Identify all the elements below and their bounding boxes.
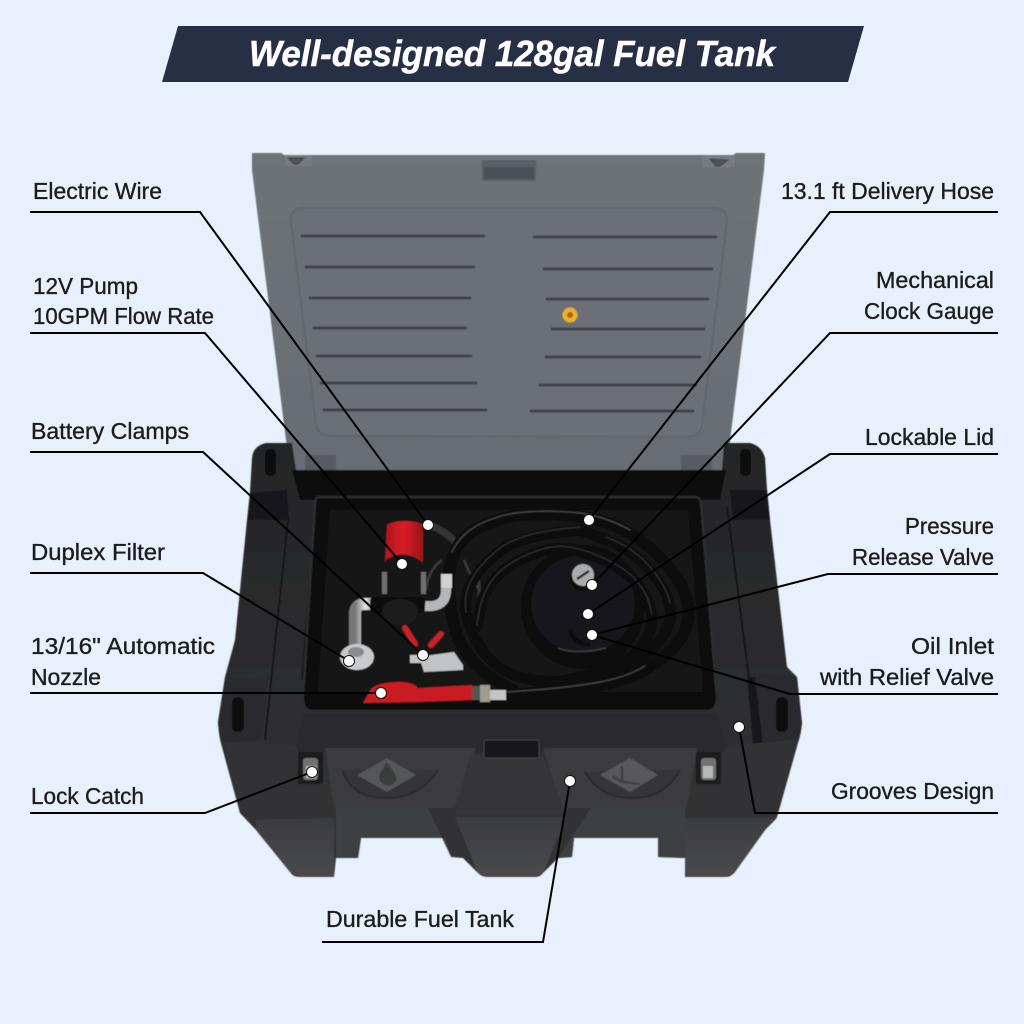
callout: Oil Inlet with Relief Valve (586, 630, 998, 694)
lock catches (298, 752, 721, 784)
callout: Duplex Filter: Duplex Filter (31, 539, 165, 565)
recessed lid panel (291, 208, 727, 437)
front face panels (325, 748, 476, 808)
callout: Oil Inlet with Relief Valve: Oil Inlet (911, 633, 995, 659)
lower skirt (256, 817, 777, 877)
callout: 12V Pump: 10GPM Flow Rate (33, 303, 214, 329)
callout: Grooves Design: Grooves Design (831, 778, 994, 804)
callout: Pressure Release Valve (586, 513, 998, 640)
hazard label right (585, 758, 680, 798)
side handles (218, 673, 802, 745)
callout: Grooves Design (734, 722, 998, 813)
callout: Automatic Nozzle (30, 633, 386, 698)
rear black band (292, 470, 726, 500)
callout: Mechanical Clock Gauge: Mechanical (876, 267, 994, 293)
lid grooves (302, 236, 716, 411)
callout: 12V Pump: 12V Pump (33, 273, 138, 299)
front top surface (295, 713, 727, 752)
callout: Delivery Hose: 13.1 ft Delivery Hose (781, 178, 994, 204)
yellow lid plug (562, 308, 578, 322)
red fuel nozzle (363, 682, 472, 703)
front outer corners (224, 742, 325, 820)
top ear clips (265, 449, 276, 476)
inner tub (303, 497, 717, 711)
callout: Electric Wire (30, 178, 434, 530)
wire to pump (428, 525, 455, 542)
lid handle (482, 160, 536, 181)
callout: Lock Catch: Lock Catch (31, 783, 144, 809)
steel U pipe (355, 604, 376, 648)
ear shadows (248, 490, 289, 520)
callout: Durable Fuel Tank: Durable Fuel Tank (326, 906, 514, 932)
nozzle fitting (472, 686, 480, 700)
steel elbow pipe (425, 588, 446, 606)
callout: Mechanical Clock Gauge: Clock Gauge (864, 298, 994, 324)
tank lid (252, 153, 765, 472)
tank body (218, 443, 802, 877)
hazard label left (342, 758, 438, 798)
grey wires behind hose (426, 560, 480, 625)
fuel tank illustration (218, 153, 802, 877)
callout: Oil Inlet with Relief Valve: with Relief Valve (819, 664, 994, 690)
callout: 12V Pump (30, 273, 408, 570)
callout: Mechanical Clock Gauge (586, 267, 998, 590)
red pump motor (385, 521, 423, 562)
callout: Lockable Lid (582, 424, 998, 620)
battery clamp bracket (410, 652, 463, 672)
title banner: Well-designed 128gal Fuel Tank (249, 33, 777, 74)
side grooves (265, 507, 757, 740)
callout: Durable Fuel Tank (322, 776, 576, 942)
callout: Electric Wire: Electric Wire (33, 178, 162, 204)
battery clamps (405, 628, 441, 645)
delivery hose coils (448, 511, 689, 695)
callout: Lock Catch (30, 766, 318, 813)
lid hinge tabs (305, 455, 336, 471)
callout: Pressure Release Valve: Release Valve (852, 544, 994, 570)
duplex filter flange (340, 644, 374, 670)
callout: Delivery Hose (584, 178, 998, 526)
fuel tank base boss (521, 545, 645, 669)
pump body (370, 554, 426, 625)
front handle recess (484, 740, 539, 758)
callout: Automatic Nozzle: 13/16" Automatic (31, 633, 215, 659)
callout: Duplex Filter (30, 539, 354, 666)
callout: Battery Clamps: Battery Clamps (31, 418, 189, 444)
title banner (162, 26, 864, 82)
pressure gauge (570, 564, 596, 591)
lid hinge screws (288, 158, 728, 166)
callout: Pressure Release Valve: Pressure (905, 513, 994, 539)
callout: Automatic Nozzle: Nozzle (31, 664, 101, 690)
callout: Lockable Lid: Lockable Lid (865, 424, 994, 450)
callout: Battery Clamps (30, 418, 428, 660)
